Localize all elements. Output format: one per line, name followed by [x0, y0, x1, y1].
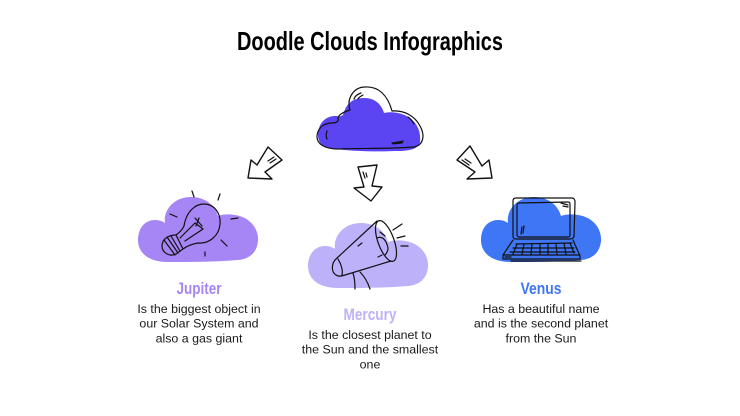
- arrow: right: [457, 146, 492, 179]
- heading: Jupiter: Jupiter: [176, 279, 222, 298]
- main cloud icon: [317, 87, 423, 151]
- text: Mercury description: one: [360, 357, 380, 371]
- text: Jupiter description: Is the biggest object in: [137, 302, 261, 316]
- cloud: Jupiter: [138, 197, 258, 262]
- heading: Venus: Venus: [520, 279, 562, 298]
- text: Jupiter description: our Solar System and: [139, 317, 259, 331]
- text: Jupiter description: also a gas giant: [156, 331, 243, 345]
- text: Venus description: and is the second planet: [474, 317, 609, 331]
- icon: laptop: [503, 198, 581, 261]
- text: Mercury description: Is the closest planet to: [308, 328, 432, 342]
- arrow: left: [248, 147, 282, 179]
- arrow: centre: [354, 165, 382, 201]
- text: Venus description: Has a beautiful name: [482, 302, 600, 316]
- text: Venus description: from the Sun: [506, 331, 577, 345]
- heading: Mercury: Mercury: [344, 305, 397, 324]
- icon: megaphone: [332, 218, 408, 289]
- title: Doodle Clouds Infographics: [237, 26, 503, 56]
- cloud: Venus: [481, 197, 601, 262]
- icon: light bulb: [162, 191, 238, 256]
- cloud: Mercury: [308, 223, 428, 288]
- text: Mercury description: the Sun and the smallest: [302, 343, 439, 357]
